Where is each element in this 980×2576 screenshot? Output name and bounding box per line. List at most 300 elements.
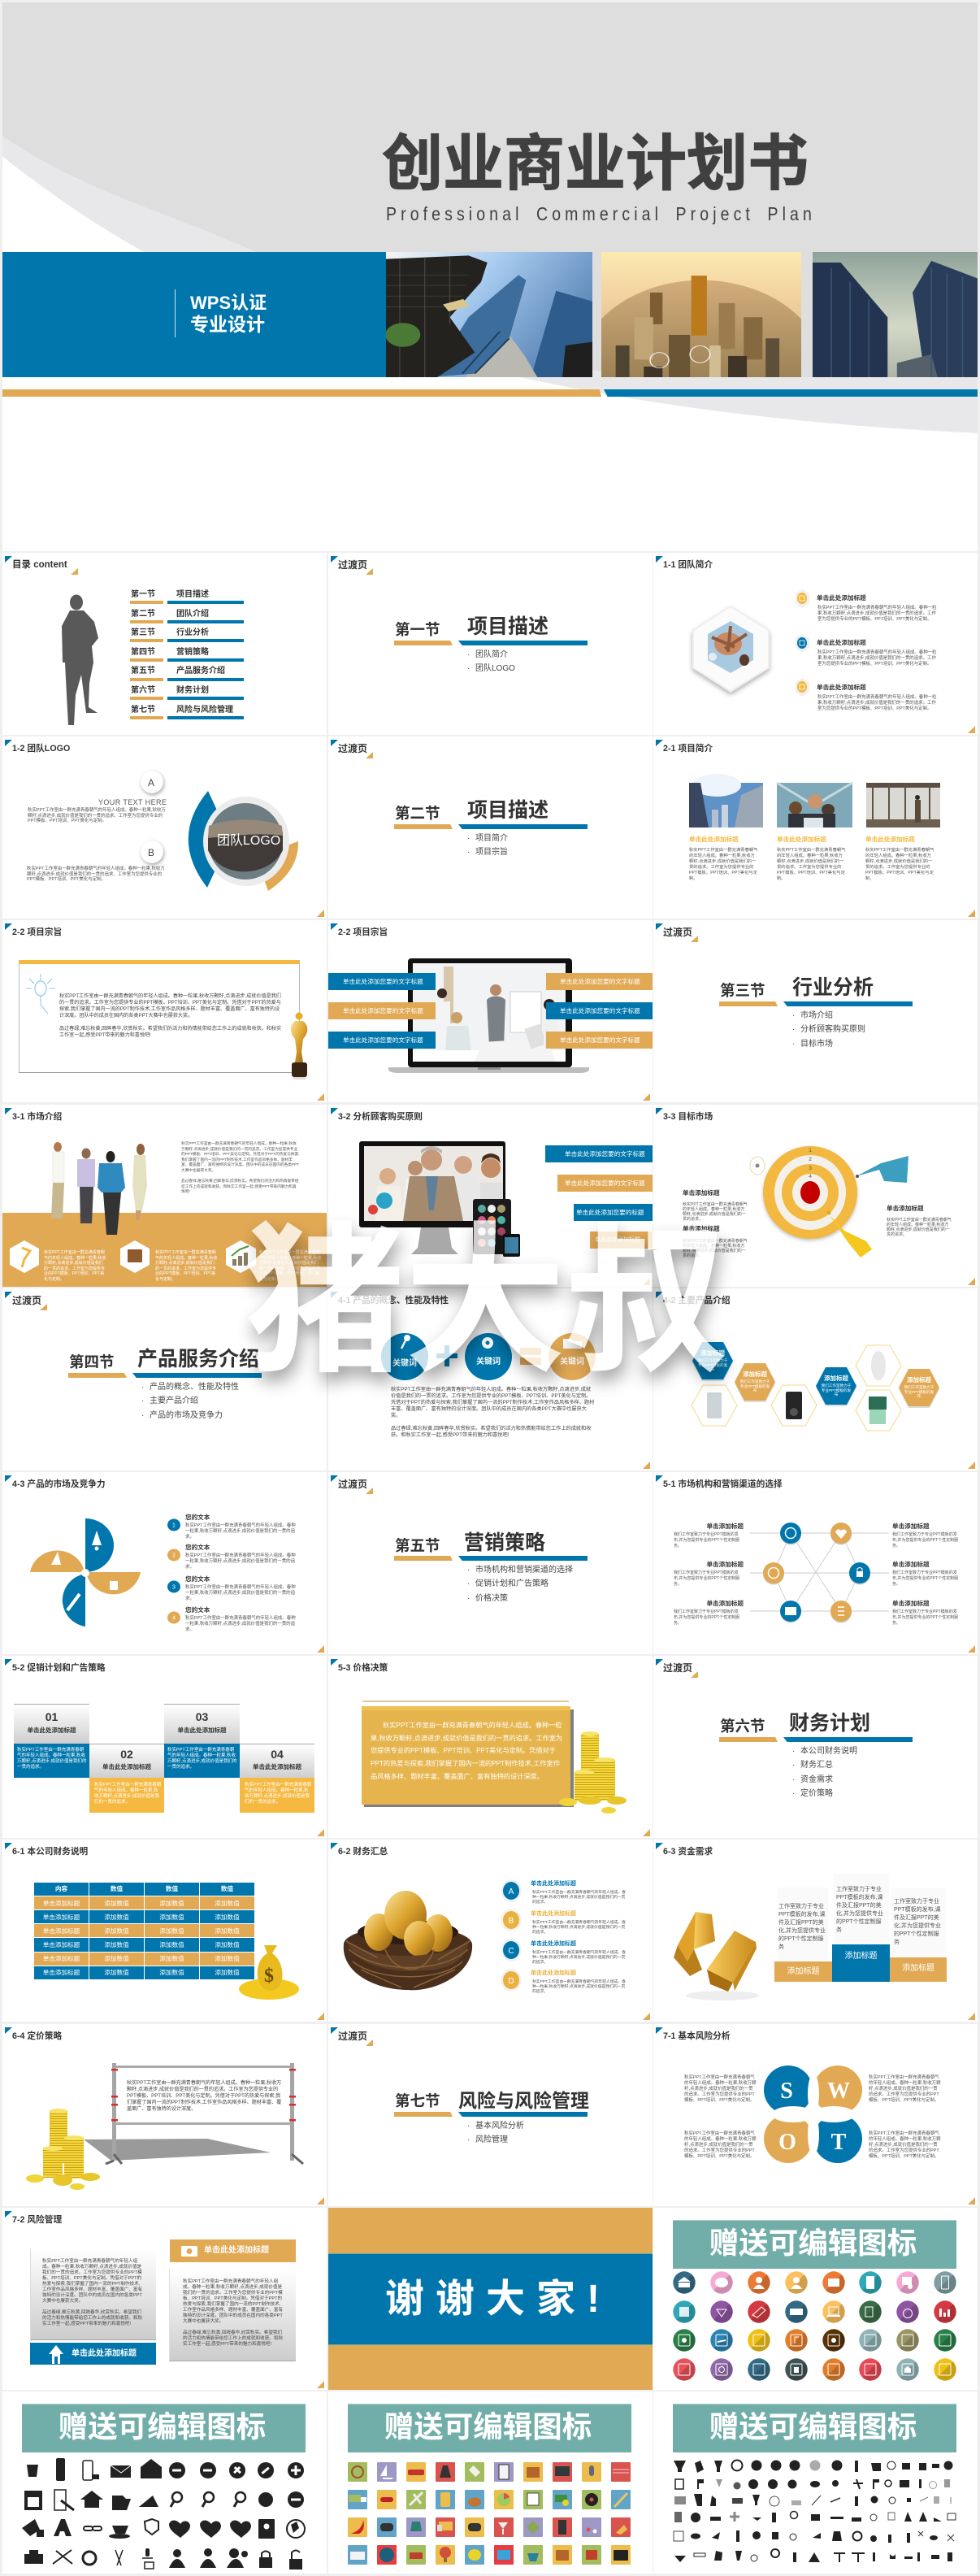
left label 1: 我们工作室致力于专业PPT模板的发布,并为您提供专业的PPT个性定制服务。 [674,1532,739,1549]
callout left 2: 单击此处添加您要的文字标题 [343,1007,423,1014]
badge A: A [148,777,154,788]
menu list: 产品服务介绍 [176,667,225,675]
item C: 单击此处添加标题 [531,1941,576,1947]
hex 4 label: 添加标题 [907,1376,931,1384]
T text: 秋实PPT工作室由一群充满青春朝气的年轻人组成。春种一粒果,秋收万颗籽,点滴进步,成就价值是我们的一贯的追求。工作室为您提供专业的PPT模板、PPT培训、PPT美化与定制。 [869,2131,941,2159]
item 1 title: 单击此处添加标题 [817,594,866,602]
keyword 1: 关键词 [392,1359,417,1368]
callout right 1: 单击此处添加您要的文字标题 [560,978,640,985]
market text: 秋实PPT工作室由一群充满青春朝气的年轻人组成。春种一粒果,秋收万颗籽,点滴进步,成就价值是我们的一贯的追求。工作室为您提供专业的PPT模板、PPT培训、PPT美化与定制。凭借对于PPT的热爱与探索,我们掌握了国内一流的PPT制作技术,工作室作品风格多样、题材丰富、覆盖面广、富有独特的设计深度。团队中的成员在国内的各类PPT大赛中也屡获大奖。 [181,1141,300,1172]
keyword 3: 关键词 [560,1358,584,1366]
panel: 7-1 SWOT [653,2024,978,2206]
step 03: 单击此处添加标题 [177,1727,226,1734]
left label 3: 单击添加标题 [706,1600,744,1607]
card stack [328,1656,653,1838]
icon: gold coins [2,2024,327,2206]
data table: 添加数值 [159,1955,184,1962]
bullet list: 市场机构和营销渠道的选择 [475,1566,573,1575]
data table: 数值 [221,1885,233,1892]
data table: 添加数值 [104,1941,129,1948]
bullet list: 产品的概念、性能及特性 [150,1383,239,1392]
callout 1 [545,1145,653,1162]
orange title button: 单击此处添加标题 [204,2246,269,2255]
bullet list: 财务汇总 [800,1761,833,1770]
bullet list [142,1382,239,1420]
section number: 第二节 [395,805,440,822]
heading: 4-2 主要产品介绍 [663,1296,731,1305]
heading: 过渡页 [338,2031,367,2042]
hex 1 label: 添加标题 [700,1349,725,1357]
item 2: 秋实PPT工作室由一群充满青春朝气的年轻人组成。春种一粒果,秋收万颗籽,点滴进步,成就价值是我们的一贯的追求。 [185,1553,296,1570]
item 2 text: 秋实PPT工作室由一群充满青春朝气的年轻人组成。春种一粒果,秋收万颗籽,点滴进步,成就价值是我们的一贯的追求。工作室为您提供专业的PPT模板、PPT培训、PPT美化与定制。 [817,650,937,667]
icon: golden eggs in nest [328,1840,653,2022]
hex 3 label: 添加标题 [824,1375,848,1382]
item C [531,1940,627,1966]
panel: 3-1 market [2,1105,327,1287]
item D: 单击此处添加标题 [531,1970,576,1976]
section number: 第一节 [395,621,440,638]
panel: 7-2 risk management [2,2208,327,2390]
callout right 3 [546,1032,653,1049]
section title: 产品服务介绍 [137,1348,259,1371]
three photos [689,774,940,828]
item B: 秋实PPT工作室由一群充满青春朝气的年轻人组成。春种一粒果,秋收万颗籽,点滴进步,成就价值是我们的一贯的追求。 [532,1921,626,1935]
blue title button: 单击此处添加标题 [72,2349,137,2358]
step 03 [164,1704,240,1744]
numbered markers: 1 [172,1523,176,1528]
heading: 过渡页 [12,1295,41,1306]
bullet list: 项目宗旨 [475,848,508,857]
callout 2: 单击此处添加您要的文字标题 [565,1179,645,1187]
bullet list: 促销计划和广告策略 [475,1579,549,1588]
step 03: 03 [196,1710,208,1723]
podium right [890,1957,947,1982]
panel: 2-1 project intro [653,736,978,919]
black icon grid [2,2391,327,2574]
photo: dark towers [813,252,978,377]
SWOT diagram: W [827,2079,850,2104]
heading: 6-4 定价策略 [12,2031,62,2041]
item C: 秋实PPT工作室由一群充满青春朝气的年轻人组成。春种一粒果,秋收万颗籽,点滴进步,成就价值是我们的一贯的追求。 [532,1951,626,1965]
item 4: 您的文本 [185,1606,210,1614]
section title: 行业分析 [792,976,874,999]
banner title: 赠送可编辑图标 [59,2410,266,2444]
SWOT diagram: T [831,2130,847,2155]
heading: 5-2 促销计划和广告策略 [12,1663,106,1673]
heading: 2-1 项目简介 [663,744,713,754]
banner title [673,2220,956,2269]
S text: 秋实PPT工作室由一群充满青春朝气的年轻人组成。春种一粒果,秋收万颗籽,点滴进步,成就价值是我们的一贯的追求。工作室为您提供专业的PPT模板、PPT培训、PPT美化与定制。 [684,2075,757,2103]
icon: gold coins [328,1656,653,1838]
item 3 text: 秋实PPT工作室由一群充满青春朝气的年轻人组成。春种一粒果,秋收万颗籽,点滴进步,成就价值是我们的一贯的追求。工作室为您提供专业的PPT模板、PPT培训、PPT美化与定制。 [817,695,937,711]
heading: 1-1 团队简介 [663,560,713,570]
bullet list: 分析顾客购买原则 [800,1025,865,1034]
heading: 过渡页 [338,559,367,571]
column 3 text: 秋实PPT工作室由一群充满青春朝气的年轻人组成。春种一粒果,秋收万颗籽,点滴进步,成就价值是我们的一贯的追求。工作室为您提供专业的PPT模板、PPT培训、PPT美化与定制。 [865,848,934,881]
left label 2: 单击添加标题 [706,1561,744,1568]
item 1: 秋实PPT工作室由一群充满青春朝气的年轻人组成。春种一粒果,秋收万颗籽,点滴进步,成就价值是我们的一贯的追求。 [185,1523,296,1540]
heading: 6-1 本公司财务说明 [12,1847,88,1857]
markers A-D: C [508,1947,514,1956]
data table: 添加数值 [215,1955,240,1962]
cover background curves [2,2,978,433]
step 04: 04 [271,1748,284,1761]
panel: cover slide [2,2,978,551]
blue title button [30,2343,156,2365]
cover subtitle: Professional Commercial Project Plan [386,204,816,225]
heading: 3-3 目标市场 [663,1112,713,1122]
hex 3 label: 我们工作室致力于专业PPT模板的发布 [822,1384,851,1397]
SWOT diagram: S [780,2079,793,2104]
step 01 text: 秋实PPT工作室由一群充满青春朝气的年轻人组成。春种一粒果,秋收万颗籽,点滴进步,成就价值是我们的一贯的追求。 [17,1748,87,1770]
sports icon grid [653,2391,978,2574]
heading: 目录 content [12,560,67,570]
section title: 项目描述 [467,615,549,638]
data table: 添加数值 [159,1941,184,1948]
panel: gift icons round [653,2208,978,2390]
hex 1 label: 我们工作室致力于专业PPT模板的发布 [698,1358,727,1371]
data table: 添加数值 [104,1900,129,1907]
markers A-D [328,1840,653,2022]
bullet list: 风险管理 [475,2135,508,2144]
callout 2 [557,1175,653,1192]
badge text: 专业设计 [190,314,265,335]
section number: 第六节 [720,1718,765,1735]
podium left [774,1961,832,1982]
heading: 1-2 团队LOGO [12,744,70,754]
body text: 秋实PPT工作室由一群充满青春朝气的年轻人组成。春种一粒果,秋收万颗籽,点滴进步,成就价值是我们的一贯的追求。工作室为您提供专业的PPT模板、PPT培训、PPT美化与定制。 [391,1387,591,1399]
callout 4: 单击此处添加标题 [595,1237,640,1243]
hex text 2: 秋实PPT工作室由一群充满青春朝气的年轻人组成。春种一粒果,秋收万颗籽,点滴进步,成就价值是我们的一贯的追求。工作室为您提供专业的PPT模板、PPT培训、PPT美化与定制。 [155,1250,217,1282]
section number: 第七节 [395,2092,440,2109]
bullet list: 项目简介 [475,834,508,843]
item B: 单击此处添加标题 [531,1911,576,1917]
podium left: 添加标题 [787,1967,819,1976]
badge text: WPS认证 [190,293,267,313]
bullet list [793,1010,865,1049]
banner title: 赠送可编辑图标 [709,2410,917,2444]
hexagon cluster [691,1342,939,1431]
bullet list: 价格决策 [475,1594,508,1603]
heading: 3-1 市场介绍 [12,1112,62,1122]
panel: 3-2 buying principles [328,1105,653,1287]
item B [531,1910,627,1936]
data table: 添加数值 [159,1900,184,1907]
item 1 [185,1514,296,1540]
heading: 过渡页 [338,743,367,754]
numbered markers: 3 [172,1585,176,1590]
banner title [348,2404,631,2452]
panel: 4-3 competitiveness [2,1472,327,1654]
menu list: 第三节 [131,628,155,637]
panel: 6-1 finance table [2,1840,327,2022]
step 02 [89,1744,164,1778]
blue band [328,2254,653,2344]
board text: 秋实PPT工作室由一群充满青春朝气的年轻人组成。春种一粒果,秋收万颗籽,点滴进步,成就价值是我们的一贯的追求。工作室为您提供专业的PPT模板、PPT培训、PPT美化与定制。凭借对于PPT的热爱与探索,我们掌握了国内一流的PPT制作技术,工作室作品风格多样、题材丰富、覆盖面广、富有独特的设计深度。 [127,2080,281,2112]
left title 2: 单击添加标题 [683,1225,720,1232]
markers A-D: A [509,1887,514,1896]
section title: 财务计划 [789,1712,870,1735]
logo caption: 团队LOGO [217,834,280,848]
data table: 内容 [55,1885,67,1892]
callout right 3: 单击此处添加您要的文字标题 [560,1036,640,1044]
hexagon team photo [689,606,772,697]
heading: 过渡页 [663,927,692,938]
card right text: 秋实PPT工作室由一群充满青春朝气的年轻人组成。春种一粒果,秋收万颗籽,点滴进步,成就价值是我们的一贯的追求。工作室为您提供专业的PPT模板、PPT培训、PPT美化与定制。凭借对于PPT的热爱与探索,我们掌握了国内一流的PPT制作技术,工作室作品风格多样、题材丰富、覆盖面广、富有独特的设计深度。团队中的成员在国内的各类PPT大赛中也屡获大奖。 [183,2279,283,2324]
panel: thank you slide [328,2208,653,2390]
square icon grid [328,2391,653,2574]
callout 3 [574,1204,653,1221]
heading: 4-1 产品的概念、性能及特性 [338,1296,449,1305]
hex 4 label: 我们工作室致力于专业PPT模板的发布 [904,1385,934,1398]
item D: 秋实PPT工作室由一群充满青春朝气的年轻人组成。春种一粒果,秋收万颗籽,点滴进步,成就价值是我们的一贯的追求。 [532,1980,626,1994]
hex 1 label [697,1349,728,1371]
thank you text: 谢谢大家! [385,2278,611,2321]
column 2 text: 秋实PPT工作室由一群充满青春朝气的年轻人组成。春种一粒果,秋收万颗籽,点滴进步,成就价值是我们的一贯的追求。工作室为您提供专业的PPT模板、PPT培训、PPT美化与定制。 [777,848,845,881]
callout left 3: 单击此处添加您要的文字标题 [343,1036,423,1044]
hex 2 label [739,1371,770,1392]
panel: section 3 divider [653,920,978,1102]
bullet list: 产品的市场及竞争力 [150,1411,223,1420]
card left text: 秋实PPT工作室由一群充满青春朝气的年轻人组成。春种一粒果,秋收万颗籽,点滴进步,成就价值是我们的一贯的追求。工作室为您提供专业的PPT模板、PPT培训、PPT美化与定制。凭借对于PPT的热爱与探索,我们掌握了国内一流的PPT制作技术,工作室作品风格多样、题材丰富、覆盖面广、富有独特的设计深度。团队中的成员在国内的各类PPT大赛中也屡获大奖。 [42,2259,142,2304]
orange title button [170,2239,296,2262]
panel: gift icons black [2,2391,327,2574]
section number: 第五节 [395,1537,440,1554]
heading: 3-2 分析顾客购买原则 [338,1112,423,1122]
menu list: 第六节 [131,686,155,695]
column 3 title: 单击此处添加标题 [865,836,915,843]
item 4 [185,1606,296,1632]
panel: section 5 divider [328,1472,653,1654]
funding backdrop 2 [834,1874,889,1944]
heading: 7-1 基本风险分析 [663,2031,731,2041]
market text: 品过春绿,难忘秋黄,回眸春华,欣赏秋实。希望我们的活力和热情能带给您工作上的成就和收获。和秋实工作室一起,感受PPT带来的魅力和喜悦吧! [181,1179,299,1193]
step 02 text [89,1778,164,1813]
banner title: 赠送可编辑图标 [709,2226,917,2260]
menu list: 第二节 [131,610,155,619]
badge text [175,289,241,337]
paragraph 2: 品过春绿,难忘秋黄,回眸春华,欣赏秋实。希望我们的活力和热情能带给您工作上的成就和收获。和秋实工作室一起,感受PPT带来的魅力和喜悦吧! [59,1026,281,1038]
heading: 2-2 项目宗旨 [12,927,62,937]
heading: 4-3 产品的市场及竞争力 [12,1479,106,1489]
panel: section 4 divider [2,1288,327,1470]
panel: 2-2 project aim text [2,920,327,1102]
section title: 风险与风险管理 [458,2090,589,2111]
callout 4 [590,1232,653,1249]
data table: 添加数值 [104,1969,129,1976]
text card frame [19,960,300,1073]
panel: 1-1 team intro [653,553,978,735]
step 04 text: 秋实PPT工作室由一群充满青春朝气的年轻人组成。春种一粒果,秋收万颗籽,点滴进步,成就价值是我们的一贯的追求。 [245,1783,311,1805]
funding text 1: 工作室致力于专业PPT模板的发布,课件及汇报PPT的美化,并为您提供专业的PPT个性定制服务 [778,1904,826,1950]
data table: 添加数值 [215,1900,240,1907]
menu list: 团队介绍 [176,610,209,619]
item 4: 秋实PPT工作室由一群充满青春朝气的年轻人组成。春种一粒果,秋收万颗籽,点滴进步,成就价值是我们的一贯的追求。 [185,1616,296,1632]
bullet list: 基本风险分析 [475,2122,524,2131]
item A: 秋实PPT工作室由一群充满青春朝气的年轻人组成。春种一粒果,秋收万颗籽,点滴进步,成就价值是我们的一贯的追求。 [532,1891,626,1905]
data table: 单击添加标题 [43,1941,80,1948]
watermark: 猪大叔 [244,1171,726,1405]
panel: 3-3 target market [653,1105,978,1287]
target numbers: 4 [809,1174,812,1179]
target numbers: 1 [809,1148,812,1153]
left label 3: 我们工作室致力于专业PPT模板的发布,并为您提供专业的PPT个性定制服务。 [674,1609,739,1626]
blue stripe [604,389,978,397]
item 3: 秋实PPT工作室由一群充满青春朝气的年轻人组成。春种一粒果,秋收万颗籽,点滴进步,成就价值是我们的一贯的追求。 [185,1585,296,1601]
text block B: 秋实PPT工作室由一群充满青春朝气的年轻人组成。春种一粒果,秋收万颗籽,点滴进步,成就价值是我们的一贯的追求。工作室为您提供专业的PPT模板、PPT培训、PPT美化与定制。 [27,867,165,882]
icon: light bulb [26,974,55,1014]
callout left 2 [328,1002,436,1019]
data table: 数值 [111,1885,123,1892]
orange stripe [2,389,601,397]
right text: 秋实PPT工作室由一群充满青春朝气的年轻人组成。春种一粒果,秋收万颗籽,点滴进步,成就价值是我们的一贯的追求。 [887,1218,952,1237]
menu list: 财务计划 [176,686,209,695]
panel: 4-2 main products [653,1288,978,1470]
section number: 第三节 [720,982,765,999]
card right text: 品过春绿,难忘秋黄,回眸春华,欣赏秋实。希望我们的活力和热情能带给您工作上的成就和收获。和秋实工作室一起,感受PPT带来的魅力和喜悦吧! [183,2331,283,2347]
left label 2 [674,1561,744,1580]
panel: 5-1 channels [653,1472,978,1654]
bullet list: 市场介绍 [800,1011,833,1020]
body text: 品过春绿,难忘秋黄,回眸春华,欣赏秋实。希望我们的活力和热情能带给您工作上的成就和收获。和秋实工作室一起,感受PPT带来的魅力和喜悦吧! [391,1426,591,1438]
monitor tablet phone group [359,1141,520,1257]
item 3 title: 单击此处添加标题 [817,684,866,691]
item 2 [185,1544,296,1570]
menu list: 第五节 [131,667,155,675]
icon: money bag [2,1840,327,2022]
numbered markers: 2 [172,1553,176,1559]
step 04: 单击此处添加标题 [253,1763,301,1770]
menu list: 营销策略 [176,648,209,657]
hex 3 label [821,1375,852,1397]
step 01: 单击此处添加标题 [28,1727,76,1734]
icon: businessman silhouette [62,595,98,725]
round flat icon grid [653,2208,978,2390]
step 01 text [14,1744,89,1778]
panel: 6-2 finance summary [328,1840,653,2022]
logo graphic [140,771,298,891]
icon: gold bars [653,1840,978,2022]
data table: 数值 [166,1885,178,1892]
item 3 [185,1575,296,1601]
left label 1 [674,1523,744,1542]
bullet list [328,1564,653,1606]
callout left 1: 单击此处添加您要的文字标题 [343,978,423,985]
data table: 添加数值 [215,1969,240,1976]
card right text [183,2279,284,2348]
data table: 添加数值 [159,1969,184,1976]
step 01 [14,1704,89,1744]
markers A-D: B [509,1917,514,1926]
cover title: 创业商业计划书 [382,129,809,198]
bullet list: 定价策略 [800,1789,833,1798]
left label 1: 单击添加标题 [706,1523,744,1530]
panel: 6-4 pricing strategy [2,2024,327,2206]
bullet list [468,833,508,857]
hex 2 label: 添加标题 [743,1371,767,1378]
panel: 1-2 team logo [2,736,327,919]
step 02: 单击此处添加标题 [102,1763,151,1770]
heading: 6-2 财务汇总 [338,1847,388,1857]
right label 2: 单击添加标题 [892,1561,930,1568]
panel: 5-3 pricing [328,1656,653,1838]
heading text: YOUR TEXT HERE [98,798,167,806]
data table: 单击添加标题 [43,1900,80,1907]
bullet list: 团队LOGO [475,664,515,673]
bullet list [653,1745,978,1802]
callout left 1 [328,973,436,990]
right label 3: 单击添加标题 [892,1600,930,1607]
data table: 添加数值 [104,1914,129,1921]
panel: contents slide [2,553,327,735]
step 01: 01 [46,1710,58,1723]
funding backdrop 3 [891,1888,946,1957]
laptop with meeting photo [388,958,589,1073]
item 3: 您的文本 [185,1575,210,1583]
section number: 第四节 [69,1353,115,1371]
heading: 过渡页 [338,1479,367,1490]
icon: golden trophy [291,1013,307,1079]
bullet list: 团队简介 [475,650,508,659]
people illustration [51,1142,147,1235]
keyword 2: 关键词 [476,1358,501,1366]
item D [531,1970,627,1996]
step 03 text: 秋实PPT工作室由一群充满青春朝气的年轻人组成。春种一粒果,秋收万颗籽,点滴进步,成就价值是我们的一贯的追求。 [167,1748,237,1770]
card left text [42,2259,144,2327]
O text: 秋实PPT工作室由一群充满青春朝气的年轻人组成。春种一粒果,秋收万颗籽,点滴进步,成就价值是我们的一贯的追求。工作室为您提供专业的PPT模板、PPT培训、PPT美化与定制。 [684,2131,757,2159]
left text 1: 秋实PPT工作室由一群充满青春朝气的年轻人组成。春种一粒果,秋收万颗籽,点滴进步,成就价值是我们的一贯的追求。 [683,1202,748,1222]
data table: 单击添加标题 [43,1969,80,1976]
data table: 添加数值 [159,1914,184,1921]
item 1 text: 秋实PPT工作室由一群充满青春朝气的年轻人组成。春种一粒果,秋收万颗籽,点滴进步,成就价值是我们的一贯的追求。工作室为您提供专业的PPT模板、PPT培训、PPT美化与定制。 [817,606,937,622]
faint text backdrops [778,1887,828,1961]
heading: 6-3 资金需求 [663,1847,713,1857]
target with darts [749,1146,908,1258]
white hex icons [10,1240,256,1273]
card right [169,2270,296,2361]
item A: 单击此处添加标题 [531,1881,576,1887]
banner title [22,2404,306,2452]
column 1 text: 秋实PPT工作室由一群充满青春朝气的年轻人组成。春种一粒果,秋收万颗籽,点滴进步,成就价值是我们的一贯的追求。工作室为您提供专业的PPT模板、PPT培训、PPT美化与定制。 [689,848,757,881]
menu list: 第四节 [131,648,155,657]
hex text 3: 秋实PPT工作室由一群充满青春朝气的年轻人组成。春种一粒果,秋收万颗籽,点滴进步,成就价值是我们的一贯的追求。工作室为您提供专业的PPT模板、PPT培训、PPT美化与定制。 [259,1250,321,1282]
hex text 1: 秋实PPT工作室由一群充满青春朝气的年轻人组成。春种一粒果,秋收万颗籽,点滴进步,成就价值是我们的一贯的追求。工作室为您提供专业的PPT模板、PPT培训、PPT美化与定制。 [44,1250,106,1282]
podium centre: 添加标题 [845,1952,878,1961]
panel: gift icons sports [653,2391,978,2574]
photo: golden city [601,252,801,377]
card left text: 品过春绿,难忘秋黄,回眸春华,欣赏秋实。希望我们的活力和热情能带给您工作上的成就和收获。和秋实工作室一起,感受PPT带来的魅力和喜悦吧! [42,2310,142,2326]
callout 1: 单击此处添加您要的文字标题 [565,1150,645,1158]
data table: 添加数值 [215,1941,240,1948]
W text: 秋实PPT工作室由一群充满青春朝气的年轻人组成。春种一粒果,秋收万颗籽,点滴进步,成就价值是我们的一贯的追求。工作室为您提供专业的PPT模板、PPT培训、PPT美化与定制。 [869,2075,941,2103]
icon: house [2,2208,327,2390]
target numbers [809,1148,812,1179]
icon: camera [2,2208,327,2390]
hex 4 label [904,1376,934,1398]
column 2 title: 单击此处添加标题 [777,836,826,843]
callout right 1 [546,973,653,990]
callout right 2 [546,1002,653,1019]
right label 3: 我们工作室致力于专业PPT模板的发布,并为您提供专业的PPT个性定制服务。 [892,1609,958,1626]
bullet list: 本公司财务说明 [800,1747,857,1756]
step 04 text [240,1778,314,1813]
menu list: 行业分析 [176,628,209,637]
bullet list: 主要产品介绍 [150,1397,198,1405]
bullet list: 资金需求 [800,1775,833,1784]
podium right: 添加标题 [902,1964,934,1973]
item icons [796,589,809,697]
banner title: 赠送可编辑图标 [384,2410,592,2444]
